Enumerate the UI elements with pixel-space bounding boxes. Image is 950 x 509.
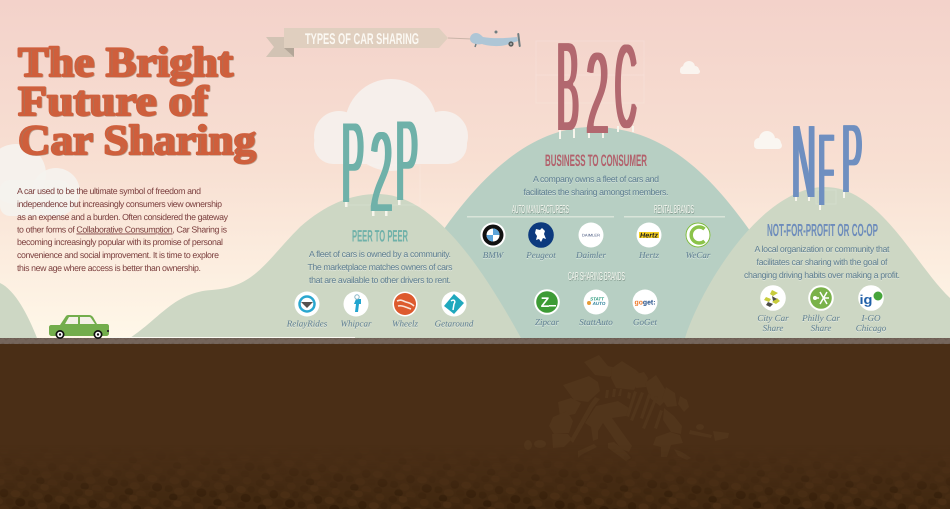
big letters: B2C: 2: [586, 28, 608, 160]
description: not-for-profit: [744, 244, 900, 280]
road: [0, 338, 950, 344]
logo: StattAuto: STATT: [590, 296, 605, 302]
logo: Daimler: [578, 222, 604, 248]
text: CAR SHARING BRANDS: [568, 271, 625, 283]
subhead: rental brands: [624, 204, 725, 218]
big letters: B2C: B: [556, 15, 578, 159]
text: BUSINESS TO CONSUMER: [545, 152, 647, 170]
fossil: stegosaurus skeleton: [524, 355, 729, 461]
description: not-for-profit: A local organization or community that: [754, 244, 890, 254]
logo: Getaround: [442, 292, 466, 316]
intro text: A car used to be the ultimate symbol of freedom and: [17, 186, 201, 196]
logo: StattAuto: AUTO: [592, 301, 606, 306]
big letters: B2C: [556, 15, 636, 160]
title: Future of: [18, 79, 209, 125]
intro text: independence but increasingly consumers view ownership: [17, 199, 222, 209]
labels: B2C top row brands: [483, 250, 711, 260]
big letters: P2P: 2: [370, 108, 392, 238]
icon: green car: [49, 315, 109, 339]
intro text: convenience and social improvement. It is time to explore: [17, 250, 219, 260]
guide grid behind letters: [345, 41, 836, 205]
labels: NFP brands: Share: [811, 323, 831, 333]
logo: Hertz: Hertz: [640, 232, 659, 240]
logo: City Car Share: [760, 285, 786, 311]
intro text: as an expense and a burden. Often considered the gateway: [17, 212, 229, 222]
description: peer to peer: [308, 249, 453, 285]
title: Car Sharing: [18, 118, 256, 164]
banner: types of car sharing: [266, 28, 472, 57]
description: not-for-profit: facilitates car sharing with the goal of: [756, 257, 888, 267]
labels: B2C bottom row brands: StattAuto: [579, 317, 613, 327]
logo: Zipcar: Z: [541, 294, 550, 310]
banner: types of car sharing: TYPES OF CAR SHARING: [305, 31, 419, 48]
big letters: NFP: N: [791, 103, 815, 221]
logo: Philly Car Share: [808, 285, 834, 311]
hill: left edge: [0, 283, 37, 338]
intro text: becoming increasingly popular with its promise of personal: [17, 237, 223, 247]
logo: StattAuto: [584, 290, 608, 314]
cloud: small top: [680, 61, 700, 74]
logo: BMW: [480, 222, 506, 248]
description: peer to peer: that are available to other drivers to rent.: [309, 275, 451, 285]
text: PEER TO PEER: [352, 228, 408, 246]
big letters: P2P: [341, 96, 417, 238]
logo: Hertz: [636, 222, 662, 248]
labels: NFP brands: Share: [763, 323, 783, 333]
labels: B2C top row brands: Peugeot: [525, 250, 556, 260]
labels: P2P brands: RelayRides: [286, 318, 328, 328]
labels: P2P brands: Whipcar: [340, 318, 372, 328]
logo: Daimler: DAIMLER: [582, 234, 600, 238]
description: peer to peer: A fleet of cars is owned by a community.: [309, 249, 451, 259]
labels: B2C bottom row brands: GoGet: [633, 317, 657, 327]
description: business to consumer: [524, 174, 668, 197]
big letters: NFP: P: [842, 103, 862, 215]
labels: B2C top row brands: BMW: [483, 250, 505, 260]
subhead: rental brands: RENTAL BRANDS: [654, 204, 694, 216]
labels: B2C top row brands: WeCar: [686, 250, 711, 260]
big letters: B2C: C: [614, 19, 636, 155]
labels: NFP brands: I-GO: [860, 313, 881, 323]
drips under NFP: [795, 191, 845, 210]
labels: P2P brands: Getaround: [435, 318, 474, 328]
title: The Bright: [18, 40, 233, 86]
big letters: NFP: [791, 103, 862, 229]
big letters: P2P: P: [341, 98, 363, 229]
logo: Wheelz: [392, 292, 418, 316]
labels: NFP brands: [757, 313, 887, 333]
labels: B2C bottom row brands: Zipcar: [535, 317, 559, 327]
title: [18, 40, 256, 164]
big letters: NFP: F: [818, 112, 833, 229]
subhead: auto manufacturers: AUTO MANUFACTURERS: [512, 204, 569, 216]
logo: Whipcar: [344, 292, 368, 316]
intro text: [17, 186, 229, 273]
cloud: small right: [754, 131, 782, 149]
hill: B2C: [380, 127, 800, 338]
ground texture: [0, 472, 950, 509]
hill: P2P: [130, 194, 521, 338]
description: business to consumer: facilitates the sharing amongst members.: [524, 187, 668, 197]
description: not-for-profit: changing driving habits over making a profit.: [744, 270, 900, 280]
hill: NFP: [685, 187, 950, 338]
logo: RelayRides: [294, 292, 320, 316]
logo: I-GO Chicago: ig: [860, 292, 873, 307]
cloud: behind P2P: [314, 79, 468, 171]
labels: P2P brands: Wheelz: [392, 318, 418, 328]
logo: Peugeot: [528, 222, 554, 248]
logo: GoGet: goget:: [634, 300, 656, 306]
sky background: [0, 0, 950, 340]
labels: B2C top row brands: Hertz: [638, 250, 659, 260]
labels: NFP brands: Chicago: [856, 323, 887, 333]
drips under B2C: [559, 126, 634, 139]
logo: Zipcar: [534, 289, 560, 315]
labels: NFP brands: City Car: [757, 313, 789, 323]
ground: [0, 344, 950, 509]
description: peer to peer: The marketplace matches owners of cars: [308, 262, 453, 272]
description: business to consumer: A company owns a fleet of cars and: [533, 174, 659, 184]
cloud: left: [0, 144, 80, 216]
intro text: this new age where access is better than ownership.: [17, 263, 201, 273]
labels: P2P brands: [286, 318, 474, 328]
drips under P2P: [345, 199, 400, 216]
white base line: [110, 337, 355, 338]
logo: WeCar: [686, 222, 710, 248]
big letters: P2P: P: [395, 96, 417, 227]
icon: plane: [470, 30, 521, 47]
labels: B2C bottom row brands: [535, 317, 657, 327]
logo: I-GO Chicago: [858, 285, 884, 311]
intro text: to other forms of Collaborative Consumption, Car Sharing is: [17, 224, 228, 234]
labels: NFP brands: Philly Car: [801, 313, 840, 323]
logo: GoGet: [632, 290, 658, 314]
labels: B2C top row brands: Daimler: [575, 250, 606, 260]
